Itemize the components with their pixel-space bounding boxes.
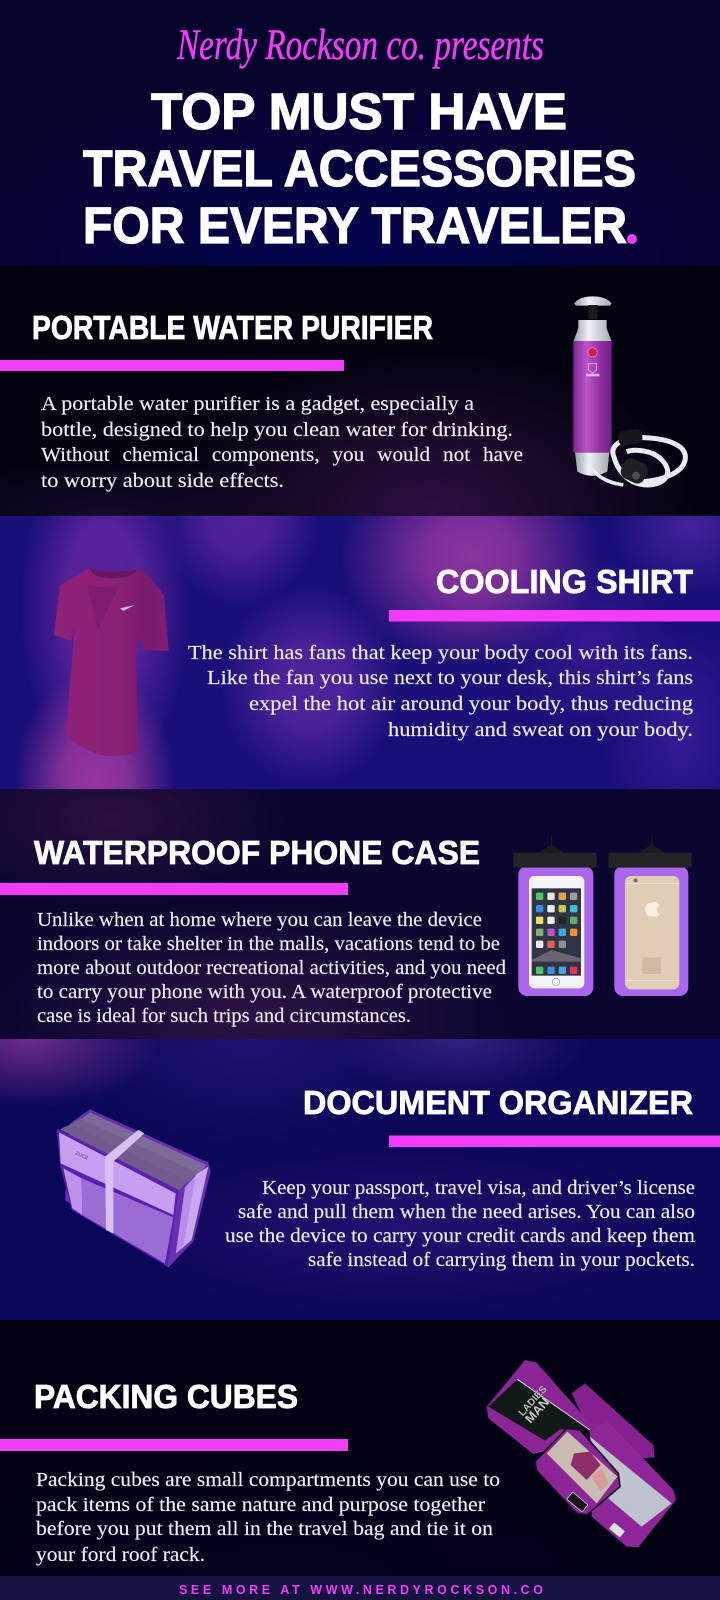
body text: pack items of the same nature and purpose together: [36, 1495, 486, 1516]
body text: before you put them all in the travel bag and tie it on: [36, 1519, 493, 1540]
title: [83, 83, 637, 254]
body text: to worry about side effects.: [41, 471, 284, 492]
accent bar: [0, 360, 344, 371]
body text: use the device to carry your credit cards and keep them: [225, 1226, 695, 1247]
body text: your ford roof rack.: [36, 1545, 205, 1566]
icon: water purifier: [573, 296, 685, 486]
body text: case is ideal for such trips and circumstances.: [37, 1006, 411, 1027]
panel: cooling shirt: [0, 516, 720, 789]
panel: footer: [0, 1576, 720, 1600]
body text: safe instead of carrying them in your pockets.: [308, 1250, 695, 1271]
icon: document organizer: [57, 1109, 211, 1267]
body text: [36, 1470, 500, 1566]
panel: header: [0, 0, 720, 266]
back case: [608, 835, 692, 996]
icon: packing cubes: MAN: [522, 1395, 552, 1426]
panel: document organizer: [0, 1039, 720, 1320]
heading: cooling shirt: COOLING SHIRT: [436, 563, 693, 600]
body text: more about outdoor recreational activities, and you need: [37, 958, 506, 979]
icon: shirt: [54, 568, 169, 756]
body text: [188, 643, 693, 741]
title: FOR EVERY TRAVELER: [83, 197, 627, 254]
body text: to carry your phone with you. A waterproof protective: [37, 982, 492, 1003]
body text: Without chemical components, you would not have: [41, 445, 523, 466]
body text: bottle, designed to help you clean water for drinking.: [41, 420, 513, 441]
title: TRAVEL ACCESSORIES: [83, 140, 636, 197]
body text: Unlike when at home where you can leave the device: [37, 910, 482, 931]
heading: packing cubes: PACKING CUBES: [34, 1378, 298, 1415]
body text: humidity and sweat on your body.: [388, 720, 693, 741]
footer link text: SEE MORE AT WWW.NERDYROCKSON.CO: [179, 1583, 543, 1597]
accent bar: [0, 883, 348, 895]
body text: [37, 910, 506, 1027]
front case: [513, 835, 597, 996]
heading: portable water purifier: PORTABLE WATER PURIFIER: [32, 309, 433, 346]
body text: indoors or take shelter in the malls, vacations tend to be: [37, 934, 500, 955]
icon: packing cubes: LADIES: [517, 1384, 550, 1419]
subtitle: Nerdy Rockson co. presents: [176, 22, 544, 69]
body text: Keep your passport, travel visa, and driver’s license: [262, 1178, 695, 1199]
panel: waterproof phone case: [0, 789, 720, 1039]
icon: document organizer: zuca: [74, 1149, 90, 1162]
panel: portable water purifier: [0, 266, 720, 516]
body text: [41, 394, 523, 492]
body text: safe and pull them when the need arises. You can also: [238, 1202, 695, 1223]
icon: packing cubes: [487, 1360, 676, 1547]
panel: packing cubes: [0, 1320, 720, 1576]
accent bar: [389, 1136, 720, 1147]
accent bar: [389, 610, 720, 622]
heading: document organizer: DOCUMENT ORGANIZER: [303, 1084, 693, 1121]
title: TOP MUST HAVE: [151, 83, 567, 140]
body text: The shirt has fans that keep your body cool with its fans.: [188, 643, 693, 664]
body text: Like the fan you use next to your desk, this shirt’s fans: [207, 668, 693, 689]
body text: Packing cubes are small compartments you can use to: [36, 1470, 500, 1491]
accent bar: [0, 1439, 348, 1451]
icon: waterproof phone cases: [513, 835, 692, 996]
body text: A portable water purifier is a gadget, especially a: [41, 394, 474, 415]
heading: waterproof phone case: WATERPROOF PHONE CASE: [34, 834, 480, 871]
body text: [225, 1178, 695, 1271]
body text: expel the hot air around your body, thus reducing: [249, 694, 693, 715]
